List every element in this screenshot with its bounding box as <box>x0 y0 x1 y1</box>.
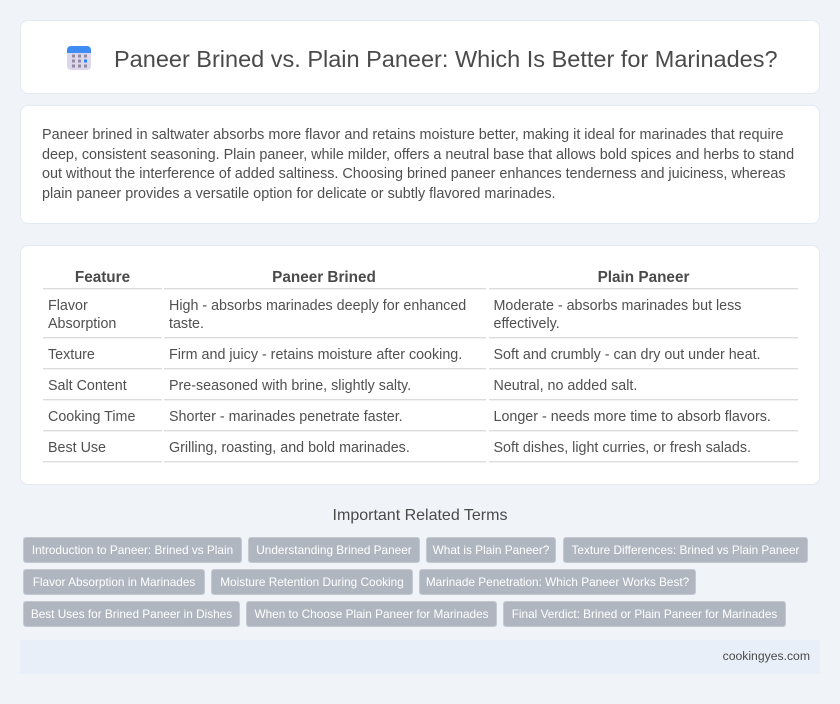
tags: related terms: Marinade Penetration: Which Paneer Works Best? <box>426 575 689 589</box>
comparison table: Longer - needs more time to absorb flavors. <box>494 409 771 425</box>
comparison table: Soft and crumbly - can dry out under heat. <box>494 347 761 363</box>
panel: introduction <box>20 105 820 224</box>
comparison table: taste. <box>169 316 204 332</box>
intro text: Paneer brined in saltwater absorbs more flavor and retains moisture better, making it ideal for marinades that require <box>42 127 784 143</box>
intro text <box>42 127 794 202</box>
comparison table: Cooking Time <box>48 409 135 425</box>
panel: comparison table <box>20 245 820 485</box>
tags: related terms: Flavor Absorption in Marinades <box>33 575 195 589</box>
title panel <box>20 20 820 94</box>
comparison table: Neutral, no added salt. <box>494 378 637 394</box>
comparison table: effectively. <box>494 316 560 332</box>
comparison table: Soft dishes, light curries, or fresh salads. <box>494 440 751 456</box>
comparison table: Shorter - marinades penetrate faster. <box>169 409 403 425</box>
comparison table: Pre-seasoned with brine, slightly salty. <box>169 378 411 394</box>
tags: related terms: What is Plain Paneer? <box>433 543 549 557</box>
tags: related terms: Best Uses for Brined Paneer in Dishes <box>31 607 232 621</box>
icon: calendar <box>67 46 91 70</box>
comparison table: Salt Content <box>48 378 127 394</box>
comparison table: High - absorbs marinades deeply for enhanced <box>169 298 466 314</box>
tags: related terms: Understanding Brined Paneer <box>256 543 412 557</box>
comparison table: Texture <box>48 347 95 363</box>
comparison table: Moderate - absorbs marinades but less <box>494 298 741 314</box>
tags: related terms: Moisture Retention During Cooking <box>220 575 404 589</box>
comparison table: Firm and juicy - retains moisture after cooking. <box>169 347 462 363</box>
tags: related terms <box>23 537 808 627</box>
footer bar <box>20 640 820 674</box>
comparison table: Best Use <box>48 440 106 456</box>
footer credit: cookingyes.com <box>723 649 810 663</box>
intro text: plain paneer provides a versatile option for delicate or subtly flavored marinades. <box>42 186 556 202</box>
title: Paneer Brined vs. Plain Paneer: Which Is Better for Marinades? <box>114 46 778 72</box>
comparison table: Plain Paneer <box>598 269 689 286</box>
tags: related terms: When to Choose Plain Paneer for Marinades <box>254 607 489 621</box>
comparison table: Flavor <box>48 298 88 314</box>
comparison table: Grilling, roasting, and bold marinades. <box>169 440 410 456</box>
intro text: out without the interference of added saltiness. Choosing brined paneer enhances tenderness and juiciness, whereas <box>42 166 786 182</box>
heading: related terms: Important Related Terms <box>333 507 507 524</box>
tags: related terms: Final Verdict: Brined or Plain Paneer for Marinades <box>512 607 777 621</box>
comparison table <box>43 269 798 463</box>
comparison table: Paneer Brined <box>272 269 376 286</box>
intro text: deep, consistent seasoning. Plain paneer, while milder, offers a neutral base that allows bold spices and herbs to stand <box>42 147 794 163</box>
tags: related terms: Introduction to Paneer: Brined vs Plain <box>32 543 233 557</box>
tags: related terms: Texture Differences: Brined vs Plain Paneer <box>572 543 799 557</box>
comparison table: Feature <box>75 269 130 286</box>
comparison table: Absorption <box>48 316 116 332</box>
